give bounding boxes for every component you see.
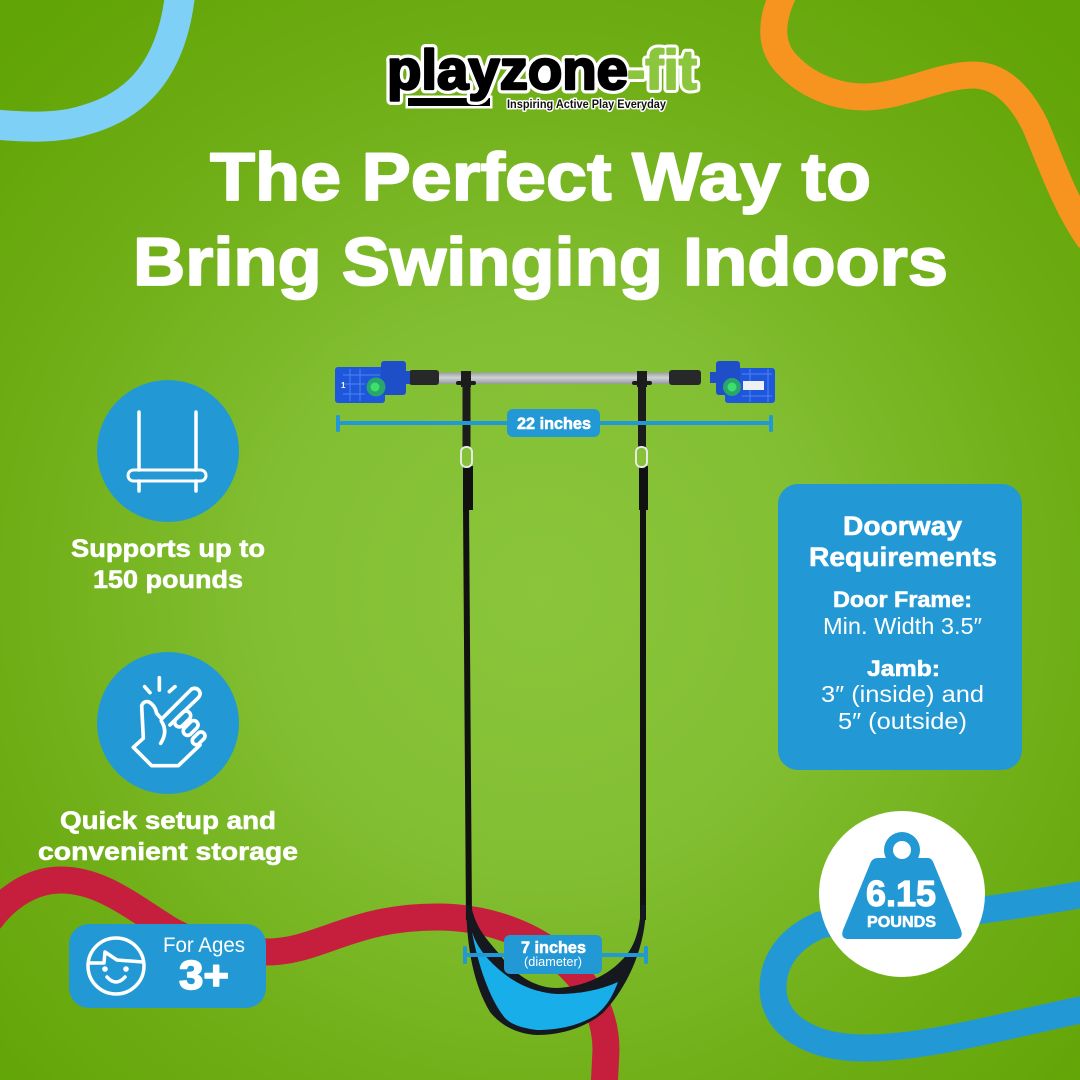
text: quick setup and convenient storage: convenient storage: [38, 838, 298, 866]
logo footprint: [538, 67, 548, 83]
heading: doorway requirements: Doorway: [843, 511, 962, 541]
title: Bring Swinging Indoors: [133, 224, 948, 300]
logo dash and fit outline: -fit: [627, 38, 697, 101]
text: jamb: 5″ (outside): [838, 708, 967, 734]
icon: finger snap in circle: [97, 652, 239, 794]
text: jamb: 3″ (inside) and: [821, 681, 984, 707]
product: doorway swing: [335, 361, 775, 1035]
door bar: [409, 370, 701, 387]
icon: child face: [88, 938, 144, 994]
text: jamb: Jamb:: [867, 656, 940, 681]
ribbon: blue bottom right: [773, 893, 1080, 1048]
dimension: 22 inches: 22 inches: [517, 415, 591, 433]
left end bracket: [335, 361, 410, 403]
text: quick setup and convenient storage: [38, 807, 298, 866]
text: 3+: 3+: [179, 952, 229, 998]
swing seat: [466, 905, 646, 1035]
logo swoosh underline: [408, 98, 490, 106]
feature: weight capacity: [71, 380, 265, 594]
text: pounds: POUNDS: [867, 914, 936, 931]
dimension: 22 inches: [336, 409, 773, 437]
swing straps: [462, 385, 648, 920]
dimension: 7 inches diameter: [463, 935, 648, 974]
text: quick setup and convenient storage: Quick setup and: [60, 807, 276, 835]
text: jamb: [821, 656, 984, 734]
logo wordmark: playzone: [387, 38, 628, 101]
text: door frame: Door Frame:: [833, 587, 972, 612]
badge: 6.15 pounds weight: [819, 811, 985, 977]
panel: doorway requirements: [778, 484, 1022, 770]
ribbon: orange top right: [774, 0, 1080, 240]
text: supports up to 150 pounds: [71, 535, 265, 594]
right end bracket: [710, 361, 775, 403]
title: [133, 139, 948, 300]
icon: kettle weight: [842, 832, 962, 939]
text: for ages: For Ages: [163, 934, 245, 957]
logo wordmark outline: playzone: [387, 38, 628, 101]
dimension: 7 inches diameter: (diameter): [524, 955, 582, 969]
heading: doorway requirements: Requirements: [809, 542, 997, 572]
logo tagline: Inspiring Active Play Everyday: [507, 97, 666, 111]
logo: playzone-fit: [387, 38, 697, 111]
feature: quick setup: [38, 652, 298, 866]
carabiners: [461, 447, 647, 467]
left end bracket: 1: [341, 381, 346, 390]
text: supports up to 150 pounds: Supports up to: [71, 535, 265, 563]
text: door frame: Min. Width 3.5″: [823, 613, 982, 639]
badge: for ages 3+: [69, 924, 266, 1008]
ribbon: crimson bottom: [0, 880, 606, 1080]
ribbon: light blue top left: [0, 0, 180, 127]
dimension: 7 inches diameter: 7 inches: [521, 938, 586, 957]
title: The Perfect Way to: [210, 139, 871, 215]
text: 6.15: 6.15: [866, 873, 936, 914]
logo dash and fit: -fit: [627, 38, 697, 101]
heading: doorway requirements: [809, 511, 997, 572]
icon: swing in circle: [97, 380, 239, 522]
text: supports up to 150 pounds: 150 pounds: [93, 566, 243, 594]
text: door frame: [823, 587, 982, 639]
